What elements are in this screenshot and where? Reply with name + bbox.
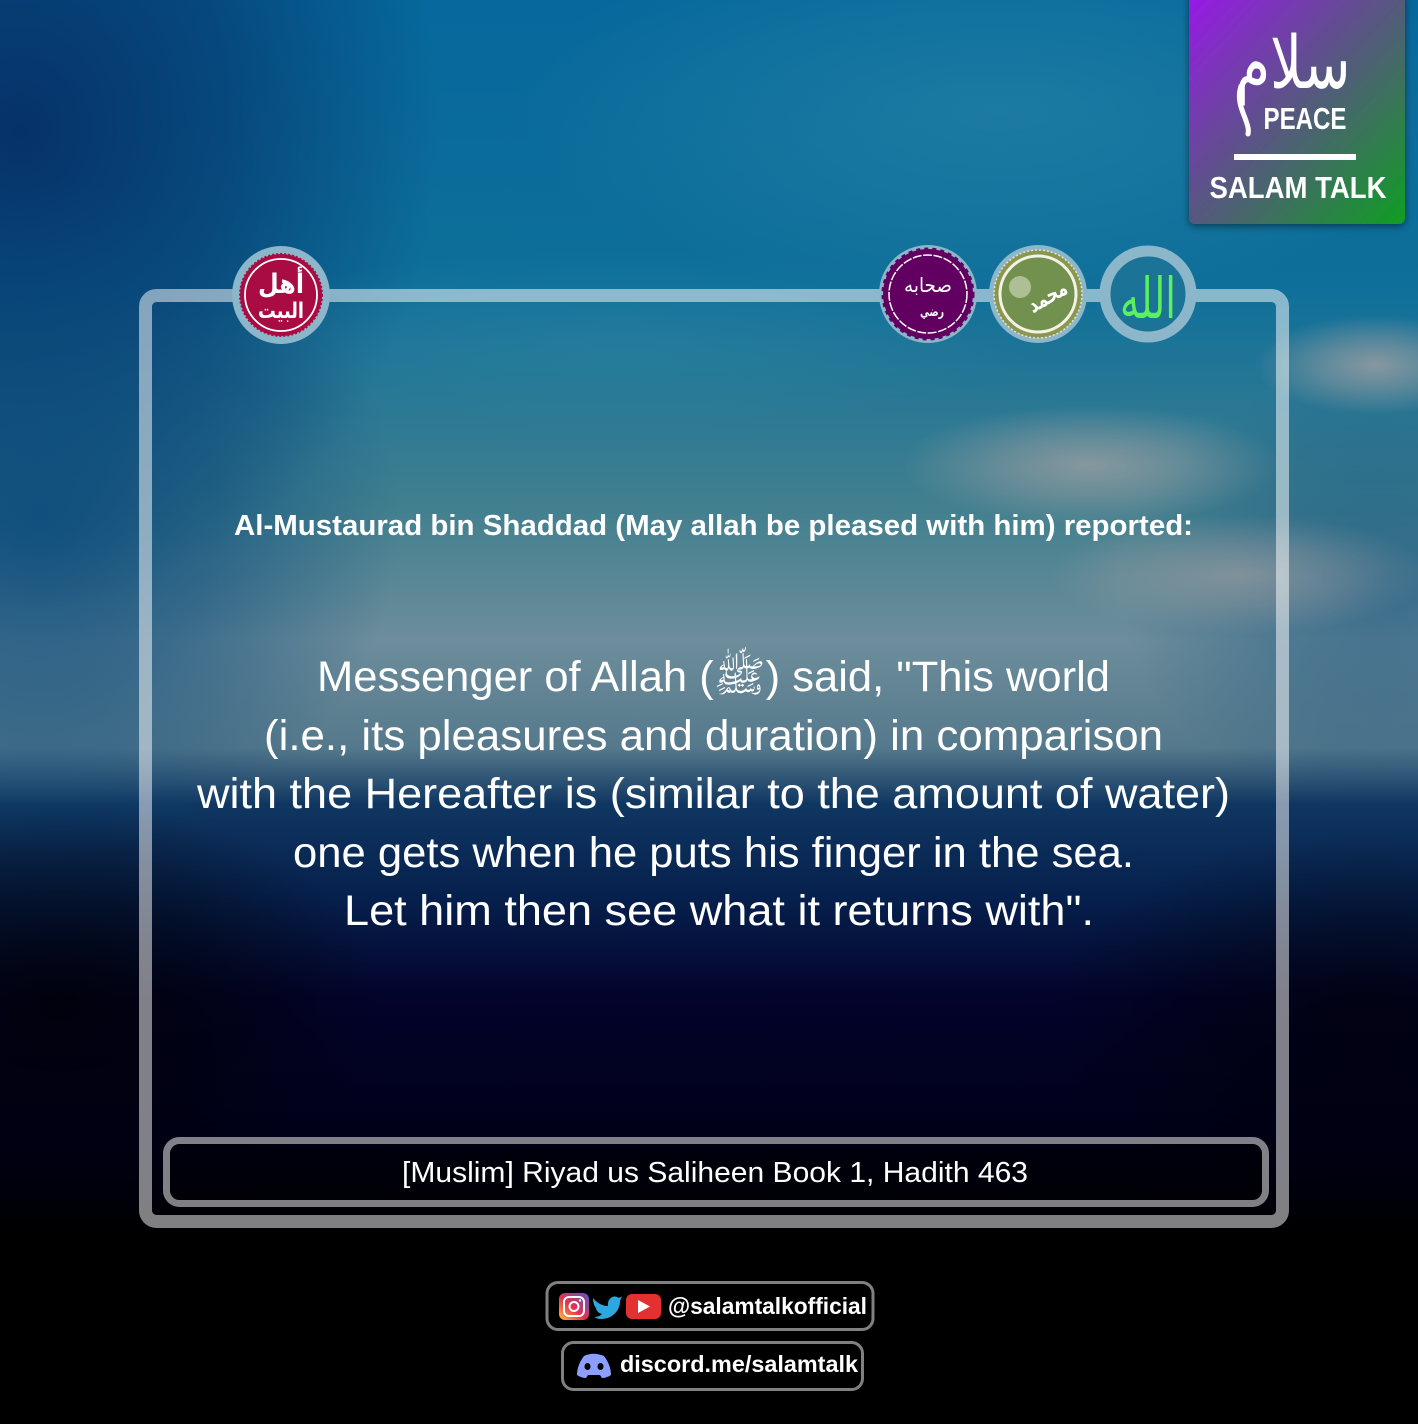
icon: Ahl al-Bayt medallion: أهل [258, 266, 304, 300]
icon: twitter [593, 1296, 622, 1319]
logo: calligraphy salam: سلام [1235, 22, 1351, 106]
logo: Salam Talk badge [1189, 0, 1405, 224]
icon: Sahaba medallion: صحابه [904, 273, 952, 297]
panel: citation box [166, 1140, 1266, 1204]
text block: hadith: Messenger of Allah (ﷺ) said, "This world [317, 646, 1110, 701]
logo: divider [1234, 154, 1356, 160]
panel: reporter heading: Al-Mustaurad bin Shaddad (May allah be pleased with him) reported: [234, 510, 1193, 542]
icon: instagram [559, 1293, 589, 1320]
discord link box [562, 1342, 862, 1390]
icon: discord [577, 1354, 611, 1378]
social handle box [547, 1282, 873, 1330]
text block: hadith: Let him then see what it returns with". [344, 888, 1094, 935]
icon: Sahaba medallion [879, 245, 977, 343]
logo: SALAM TALK label: SALAM TALK [1210, 170, 1387, 205]
text block: hadith: one gets when he puts his finger in the sea. [293, 830, 1134, 877]
text: discord link: discord.me/salamtalk [620, 1351, 858, 1377]
icon: youtube [626, 1294, 661, 1319]
text block: hadith: (i.e., its pleasures and duration) in comparison [264, 713, 1163, 760]
panel: citation box: [Muslim] Riyad us Saliheen Book 1, Hadith 463 [402, 1157, 1028, 1189]
text block: hadith: with the Hereafter is (similar to the amount of water) [196, 771, 1230, 818]
logo: PEACE label: PEACE [1264, 101, 1346, 136]
icon: Sahaba medallion: رضي [920, 305, 944, 320]
panel: translucent main frame [146, 296, 1282, 1222]
icon: Muhammad medallion [989, 245, 1087, 343]
icon: Muhammad medallion: محمد [1023, 276, 1072, 319]
text: social handle: @salamtalkofficial [668, 1293, 867, 1319]
icon: Allah medallion [1105, 251, 1191, 337]
icon: Allah medallion: الله [1120, 267, 1176, 332]
icon: Ahl al-Bayt medallion: البيت [258, 299, 304, 324]
icon: Ahl al-Bayt medallion [232, 246, 330, 344]
text block: hadith [196, 646, 1230, 935]
